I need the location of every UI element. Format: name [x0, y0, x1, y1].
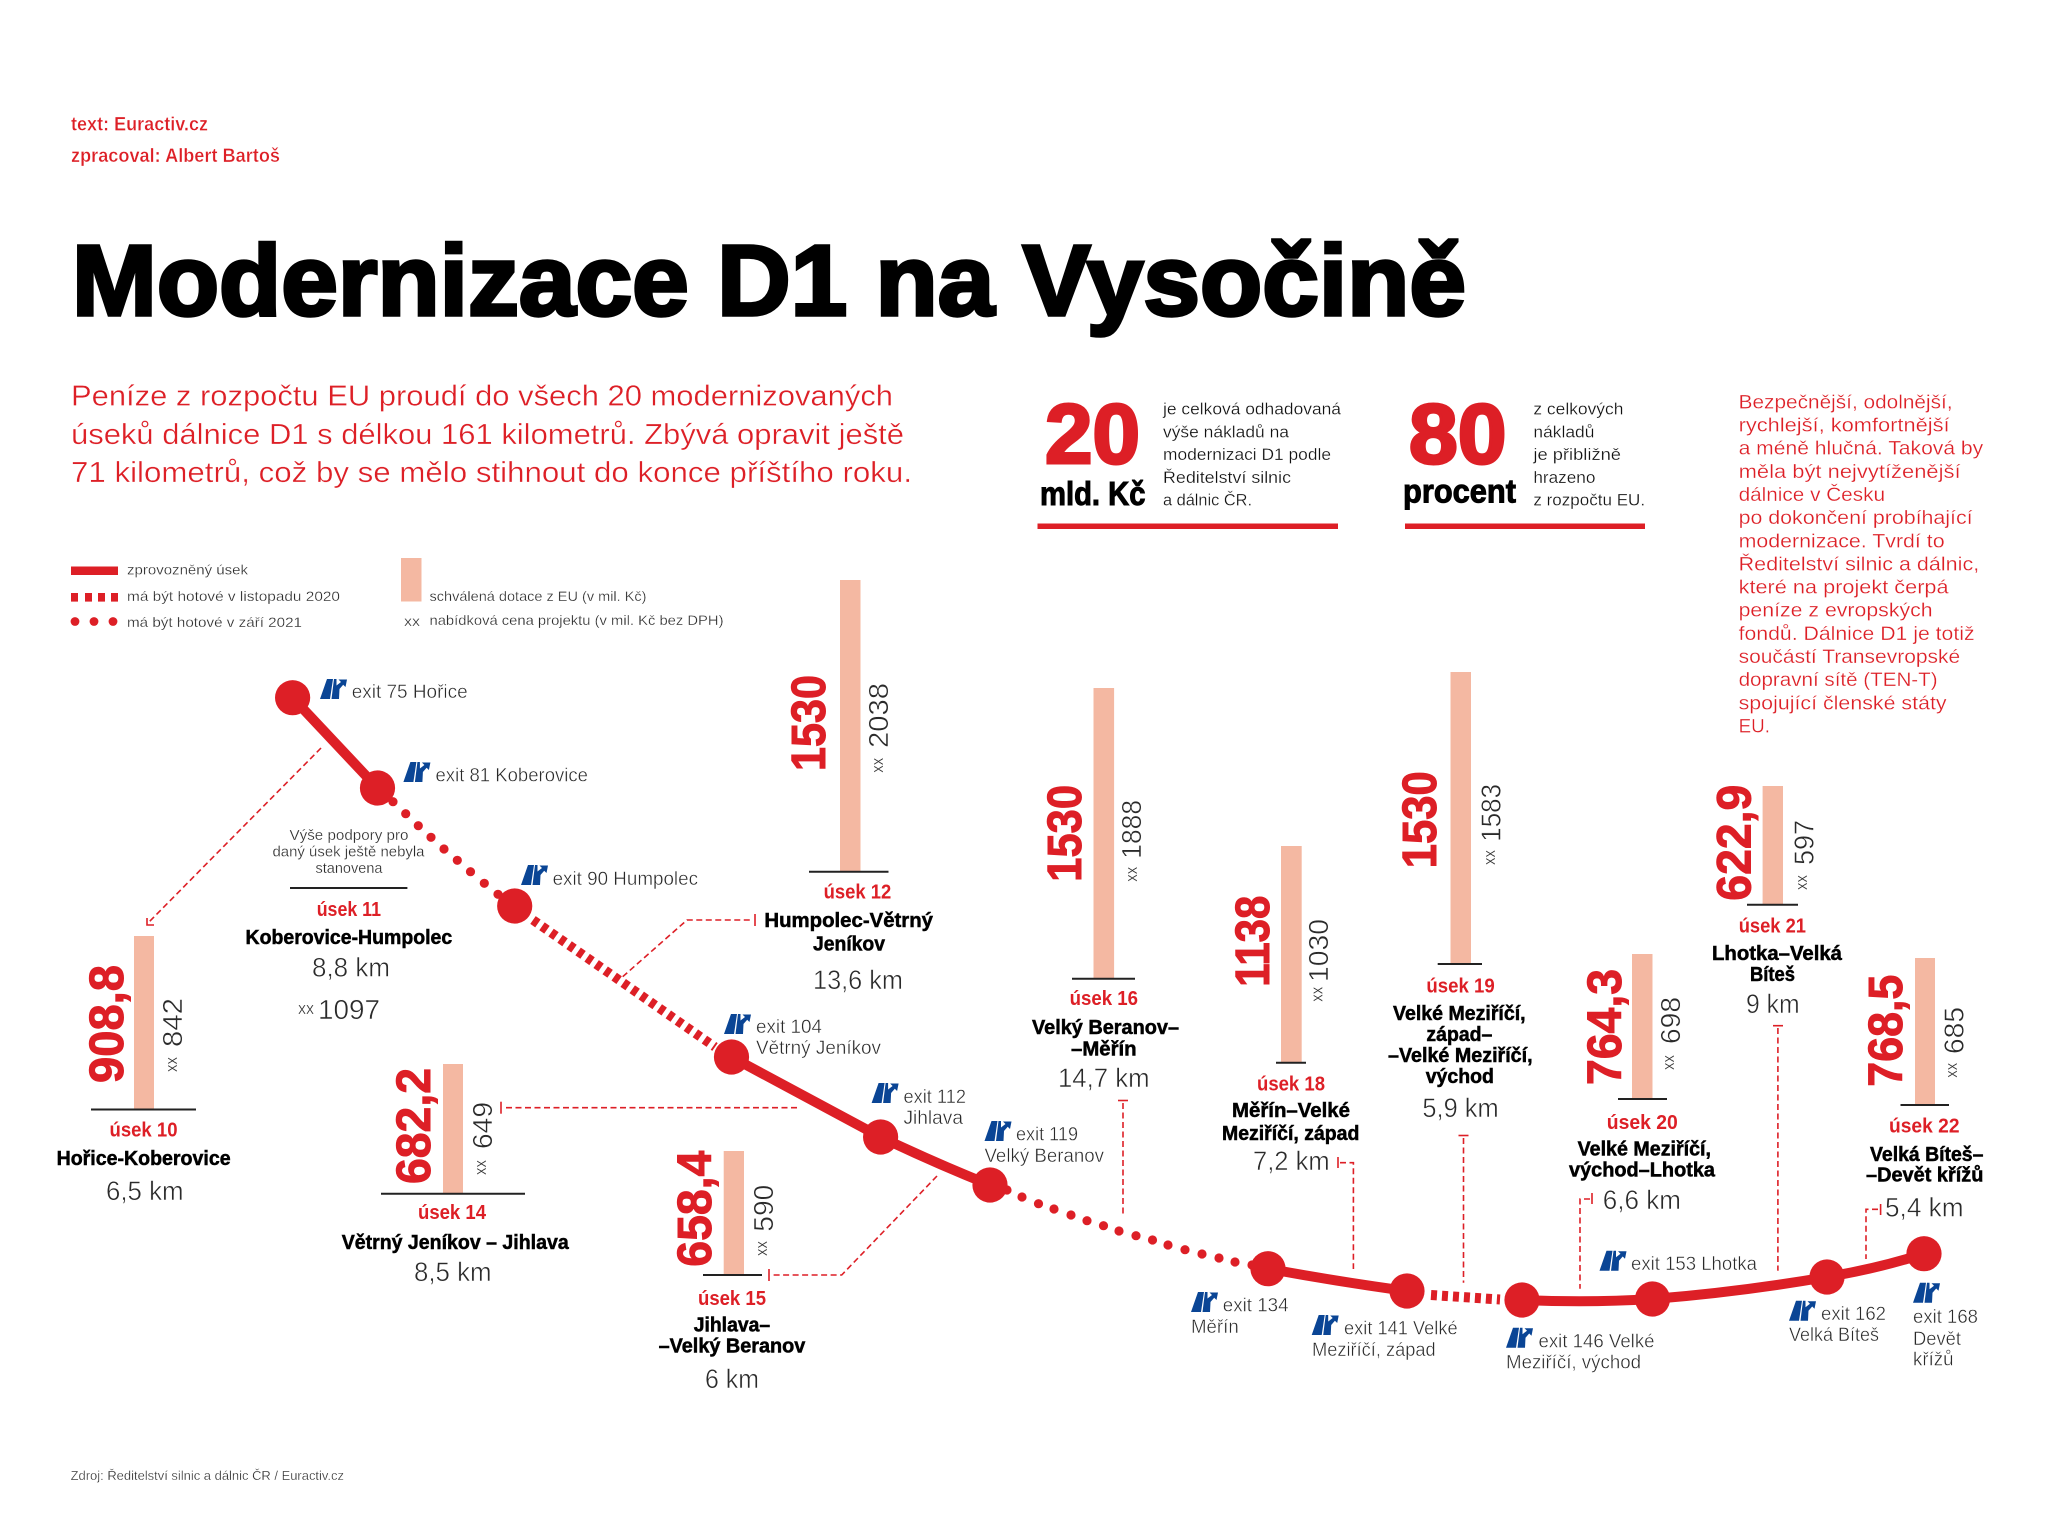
stat: 80 procent: procent [1403, 473, 1516, 510]
exit nodes [275, 680, 1942, 1318]
section 16: úsek 16 [1070, 988, 1138, 1010]
stat: 20 mld. Kč: je celková odhadovaná [1162, 399, 1342, 418]
side paragraph: dopravní sítě (TEN-T) [1739, 669, 1938, 691]
exit 162 Velká Bíteš: exit 162 [1821, 1304, 1886, 1325]
section 18: 7,2 km [1253, 1146, 1330, 1176]
stat: 80 procent: z rozpočtu EU. [1533, 491, 1645, 510]
side paragraph: EU. [1739, 716, 1770, 738]
note: support not yet set: Výše podpory pro [290, 827, 408, 844]
solid sections [293, 698, 378, 788]
exit 134 Měřín: Měřín [1191, 1317, 1239, 1338]
exit 168 Devět křížů: křížů [1913, 1350, 1954, 1371]
section 21: Bíteš [1750, 964, 1795, 986]
side paragraph: měla být nejvytíženější [1739, 461, 1961, 483]
side paragraph: fondů. Dálnice D1 je totiž [1739, 623, 1975, 645]
bar chart: section 12: 1530 [783, 675, 836, 771]
legend: subsidy bar: schválená dotace z EU (v mil. Kč) [430, 588, 646, 604]
bar chart: section 18: 1030 [1303, 919, 1334, 982]
exit 134 Měřín [1191, 1292, 1289, 1338]
exit 119 Velký Beranov: Velký Beranov [984, 1146, 1104, 1167]
section 14 [342, 1064, 570, 1287]
legend: solid road: zprovozněný úsek [127, 562, 249, 578]
section 21: Lhotka–Velká [1712, 943, 1843, 965]
section 22: 5,4 km [1885, 1193, 1964, 1223]
legend: dashed road: má být hotové v listopadu 2020 [127, 588, 340, 604]
dots 81 to 90 [388, 797, 503, 899]
note: support not yet set [272, 827, 425, 877]
bar chart: section 12: 2038 [863, 683, 894, 748]
section 11: úsek 11 [317, 899, 381, 921]
credits [71, 114, 280, 167]
side paragraph: které na projekt čerpá [1739, 577, 1949, 599]
exit 90 Humpolec: exit 90 Humpolec [553, 869, 698, 890]
exit 168 Devět křížů: Devět [1913, 1329, 1962, 1350]
stat: 80 procent: 80 [1409, 387, 1506, 481]
section 15: 6 km [705, 1364, 759, 1394]
section 19: Velké Meziříčí, [1393, 1003, 1526, 1025]
bar chart: section 21: xx [1792, 875, 1811, 890]
bar chart: section 10: 908,8 [81, 965, 134, 1083]
stat: 80 procent: je přibližně [1532, 445, 1621, 464]
section 11 [246, 827, 452, 1025]
bar chart: section 15: xx [752, 1241, 771, 1256]
exit 146 Velké Meziříčí, východ [1506, 1328, 1654, 1374]
section 22: úsek 22 [1889, 1116, 1960, 1138]
side paragraph [1739, 391, 1983, 738]
bar chart: section 14: 649 [467, 1102, 498, 1149]
section 14: Větrný Jeníkov – Jihlava [342, 1232, 570, 1254]
bar chart: section 21: 622,9 [1709, 785, 1762, 901]
bar chart: section 14: 682,2 [388, 1068, 441, 1184]
stat: 20 mld. Kč: modernizaci D1 podle [1163, 445, 1331, 464]
legend: subsidy bar [401, 558, 646, 604]
exit 146 Velké Meziříčí, východ: exit 146 Velké [1538, 1331, 1654, 1352]
exit 153 Lhotka [1600, 1251, 1757, 1275]
section 14: 8,5 km [414, 1257, 492, 1287]
section 18 [1222, 846, 1359, 1176]
bar chart: section 16: xx [1122, 866, 1141, 882]
section 20: východ–Lhotka [1569, 1160, 1716, 1182]
section 11: 1097 [318, 994, 380, 1025]
exit 134 Měřín: exit 134 [1223, 1296, 1289, 1317]
connector lines [147, 748, 1881, 1289]
exit 162 Velká Bíteš: Velká Bíteš [1789, 1325, 1879, 1346]
bar chart: section 15 [669, 1150, 779, 1275]
exit 112 Jihlava: Jihlava [904, 1108, 963, 1129]
bar chart: section 20: 698 [1655, 997, 1686, 1044]
stat: 80 procent: nákladů [1533, 422, 1594, 441]
section 20: 6,6 km [1603, 1185, 1681, 1215]
bar chart: section 19: 1530 [1394, 771, 1447, 868]
section 22 [1860, 958, 1983, 1223]
exit 81 Koberovice: exit 81 Koberovice [436, 766, 588, 787]
section 19: úsek 19 [1426, 976, 1495, 998]
exit 112 Jihlava: exit 112 [904, 1087, 966, 1108]
exit 81 Koberovice [403, 762, 588, 787]
exit 104 Větrný Jeníkov [724, 1014, 881, 1059]
exit 119 Velký Beranov [984, 1121, 1104, 1167]
section 20: Velké Meziříčí, [1578, 1139, 1711, 1161]
bar chart: section 21 [1709, 785, 1820, 905]
square dashed sections [533, 920, 715, 1047]
section 15 [659, 1150, 806, 1394]
bar chart: section 19: 1583 [1476, 784, 1506, 842]
section 21: úsek 21 [1739, 916, 1806, 938]
bar chart: section 15: 590 [748, 1185, 779, 1232]
side paragraph: Bezpečnější, odolnější, [1739, 391, 1953, 413]
section 18: Měřín–Velké [1232, 1100, 1350, 1122]
bar chart: section 18: 1138 [1227, 896, 1280, 987]
bar chart: section 22: 685 [1938, 1007, 1970, 1054]
section 10: 6,5 km [106, 1176, 184, 1206]
section 21: 9 km [1746, 989, 1800, 1019]
bar chart: section 16: 1530 [1039, 785, 1092, 882]
section 15: úsek 15 [698, 1288, 766, 1310]
side paragraph: Ředitelství silnic a dálnic, [1739, 552, 1979, 575]
bar chart: section 12: xx [868, 757, 887, 773]
bar chart: section 15: 658,4 [669, 1150, 722, 1267]
exit 104 Větrný Jeníkov: Větrný Jeníkov [756, 1038, 881, 1059]
section 18: úsek 18 [1257, 1074, 1325, 1096]
source: Zdroj: Ředitelství silnic a dálnic ČR / Euractiv.cz [71, 1468, 344, 1483]
bar chart: section 10 [81, 936, 196, 1110]
exit 141 Velké Meziříčí, západ: Meziříčí, západ [1312, 1340, 1436, 1361]
section 11: xx [298, 999, 314, 1018]
legend: dotted road [71, 614, 302, 630]
stat: 20 mld. Kč: Ředitelství silnic [1163, 468, 1292, 487]
section 20: úsek 20 [1607, 1112, 1678, 1134]
section 14: úsek 14 [418, 1202, 487, 1224]
section 11: Koberovice-Humpolec [246, 927, 452, 949]
intro text: Peníze z rozpočtu EU proudí do všech 20 modernizovaných [71, 380, 893, 412]
bar chart: section 14 [381, 1064, 525, 1194]
stat: 20 mld. Kč: výše nákladů na [1163, 422, 1290, 441]
side paragraph: a méně hlučná. Taková by [1739, 438, 1983, 460]
note: support not yet set: stanovena [316, 860, 383, 877]
side paragraph: rychlejší, komfortnější [1739, 414, 1950, 436]
legend: dotted road: má být hotové v září 2021 [127, 614, 302, 630]
stat: 80 procent: z celkových [1533, 399, 1623, 418]
section 19: západ– [1426, 1024, 1492, 1046]
side paragraph: peníze z evropských [1739, 600, 1933, 622]
intro text: úseků dálnice D1 s délkou 161 kilometrů. Zbývá opravit ještě [71, 419, 904, 451]
bar chart: section 19 [1394, 672, 1506, 964]
exit 168 Devět křížů [1913, 1283, 1978, 1371]
bar chart: section 21: 597 [1788, 820, 1820, 865]
section 16: 14,7 km [1058, 1063, 1150, 1093]
exit 162 Velká Bíteš [1789, 1301, 1886, 1346]
bar chart: section 20: 764,3 [1579, 969, 1632, 1085]
stat: 20 mld. Kč: mld. Kč [1040, 475, 1146, 512]
section 16: Velký Beranov– [1032, 1017, 1179, 1039]
exit 153 Lhotka: exit 153 Lhotka [1631, 1254, 1757, 1275]
legend: bid price: xx [404, 613, 420, 629]
title: Modernizace D1 na Vysočině [72, 225, 1466, 337]
section 12 [764, 580, 934, 995]
bar chart: section 18: xx [1308, 986, 1326, 1002]
exit 168 Devět křížů: exit 168 [1913, 1307, 1978, 1328]
intro text: 71 kilometrů, což by se mělo stihnout do konce příštího roku. [71, 457, 912, 489]
section 12: Humpolec-Větrný [764, 910, 934, 932]
section 12: Jeníkov [813, 934, 886, 956]
section 10: Hořice-Koberovice [57, 1148, 231, 1170]
section 15: Jihlava– [694, 1315, 770, 1337]
note: support not yet set: daný úsek ještě nebyla [272, 844, 425, 861]
section 18: Meziříčí, západ [1222, 1123, 1359, 1145]
exit 146 Velké Meziříčí, východ: Meziříčí, východ [1506, 1353, 1641, 1374]
legend [71, 558, 724, 630]
section 11: 8,8 km [312, 953, 390, 983]
bar chart: section 20: xx [1659, 1055, 1678, 1070]
section 15: –Velký Beranov [659, 1336, 806, 1358]
exit 75 Hořice [320, 679, 468, 703]
bar chart: section 20 [1579, 954, 1686, 1099]
section 16: –Měřín [1071, 1039, 1137, 1061]
section 19 [1388, 672, 1533, 1123]
section 16 [1032, 688, 1179, 1093]
bar chart: section 16 [1039, 688, 1147, 979]
exit 119 Velký Beranov: exit 119 [1016, 1125, 1078, 1146]
exit 104 Větrný Jeníkov: exit 104 [756, 1017, 822, 1038]
bar chart: section 19: xx [1480, 850, 1499, 865]
exit 141 Velké Meziříčí, západ [1312, 1315, 1458, 1361]
exit 112 Jihlava [872, 1083, 966, 1129]
credits: zpracoval: Albert Bartoš [71, 145, 280, 167]
section 10 [57, 936, 231, 1206]
legend: bid price: nabídková cena projektu (v mil. Kč bez DPH) [430, 612, 724, 628]
exit 75 Hořice: exit 75 Hořice [352, 682, 468, 703]
side paragraph: po dokončení probíhající [1739, 507, 1973, 529]
stat: 20 mld. Kč: 20 [1045, 387, 1140, 481]
bar chart: section 22: 768,5 [1860, 975, 1913, 1087]
side paragraph: dálnice v Česku [1739, 483, 1885, 506]
bar chart: section 10: 842 [157, 998, 188, 1047]
section 19: –Velké Meziříčí, [1388, 1045, 1533, 1067]
stat: 80 procent: hrazeno [1533, 468, 1595, 487]
section 19: 5,9 km [1422, 1093, 1499, 1123]
side paragraph: součástí Transevropské [1739, 646, 1960, 668]
side paragraph: spojující členské státy [1739, 692, 1947, 714]
bar chart: section 16: 1888 [1116, 800, 1147, 859]
section 12: 13,6 km [813, 965, 903, 995]
bar chart: section 22: xx [1942, 1062, 1961, 1078]
section 19: východ [1426, 1066, 1494, 1088]
section 21 [1709, 785, 1843, 1019]
stat: 20 mld. Kč [1038, 387, 1342, 529]
stat: 80 procent [1403, 387, 1645, 529]
bar chart: section 18 [1227, 846, 1334, 1063]
section 10: úsek 10 [110, 1120, 178, 1142]
dots 119 to 134 [1002, 1185, 1257, 1270]
bar chart: section 14: xx [471, 1160, 490, 1175]
section 12: úsek 12 [824, 882, 891, 904]
intro text [71, 380, 912, 489]
legend: solid road [71, 562, 249, 578]
bar chart: section 22 [1860, 958, 1970, 1105]
exit 90 Humpolec [521, 865, 698, 890]
side paragraph: modernizace. Tvrdí to [1739, 530, 1945, 552]
stat: 20 mld. Kč: a dálnic ČR. [1163, 491, 1252, 510]
credits: text: Euractiv.cz [71, 114, 208, 136]
section 22: –Devět křížů [1866, 1165, 1983, 1187]
exit 141 Velké Meziříčí, západ: exit 141 Velké [1344, 1318, 1458, 1339]
section 20 [1569, 954, 1716, 1215]
bar chart: section 10: xx [162, 1057, 181, 1072]
section 22: Velká Bíteš– [1870, 1144, 1983, 1166]
motorway route [275, 680, 1942, 1318]
bar chart: section 12 [783, 580, 894, 872]
